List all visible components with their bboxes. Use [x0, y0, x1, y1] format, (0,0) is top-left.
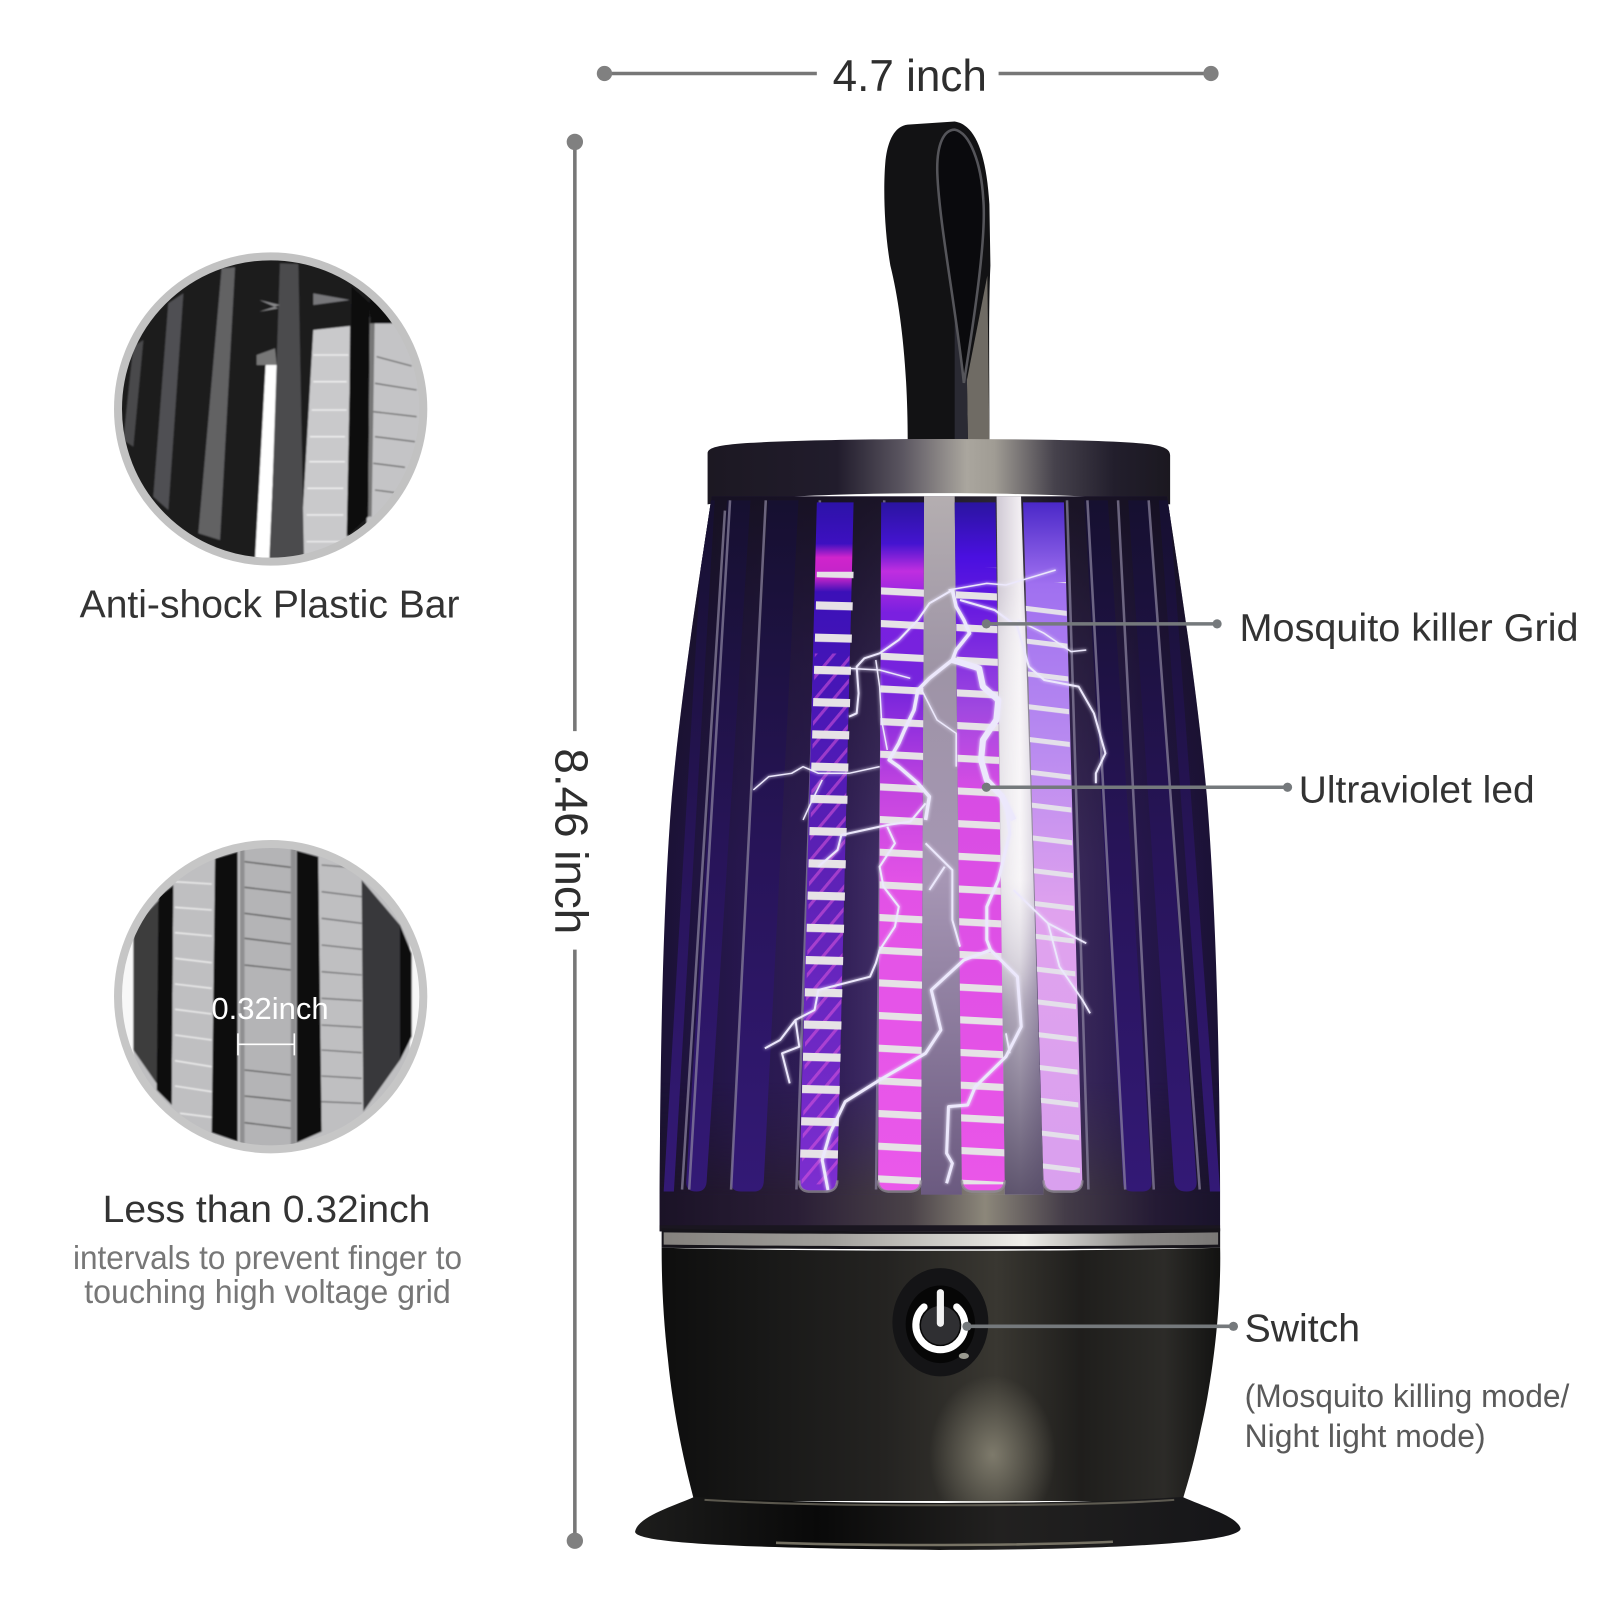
cage bar highlights: [682, 500, 1200, 1190]
cage body: [653, 490, 1225, 1235]
window A: [799, 502, 854, 1191]
side windows: [664, 500, 1220, 1192]
window B: [878, 502, 924, 1191]
callout: ultraviolet led: Ultraviolet led: [1299, 770, 1535, 812]
label: less than 0.32 inch: Less than 0.32inch: [103, 1189, 430, 1231]
top cap: [708, 439, 1170, 504]
power switch button: [892, 1268, 988, 1376]
description: switch modes: Night light mode): [1245, 1417, 1486, 1454]
window C: [955, 502, 1005, 1191]
callout: switch: Switch: [1245, 1308, 1360, 1351]
silver ring: [662, 1228, 1220, 1249]
description: switch modes: [1245, 1377, 1570, 1454]
lightning upper: [753, 570, 1105, 820]
window D: [1023, 502, 1082, 1191]
silver bars: [921, 496, 962, 1195]
width dimension: 4.7 inch: 4.7 inch: [833, 50, 987, 101]
label: anti-shock plastic bar: Anti-shock Plastic Bar: [80, 584, 460, 627]
callout: mosquito killer grid: Mosquito killer Grid: [1240, 607, 1579, 650]
detail circle: finger gap 0.32 inch: [113, 840, 430, 1157]
lightning lower: [765, 803, 1090, 1190]
description: finger protection: [73, 1240, 462, 1311]
window rims: [799, 1180, 1082, 1192]
product: mosquito killer lamp: [635, 122, 1241, 1550]
height dimension: 8.46 inch: 8.46 inch: [545, 748, 597, 934]
detail circle: anti-shock plastic bar: [113, 250, 433, 567]
callout: switch: [962, 1308, 1360, 1351]
width dimension: 4.7 inch: [597, 50, 1219, 101]
description: finger protection: touching high voltage grid: [84, 1274, 451, 1311]
callout: ultraviolet led: [982, 770, 1535, 812]
description: finger protection: intervals to prevent finger to: [73, 1240, 462, 1277]
hanging strap: [884, 122, 990, 441]
callout: mosquito killer grid: [982, 607, 1579, 650]
lower base: [662, 1248, 1220, 1535]
description: switch modes: (Mosquito killing mode/: [1245, 1377, 1570, 1414]
detail circle: finger gap 0.32 inch: 0.32inch: [211, 992, 329, 1026]
height dimension: 8.46 inch: [545, 134, 597, 1549]
flange foot: [635, 1497, 1241, 1550]
